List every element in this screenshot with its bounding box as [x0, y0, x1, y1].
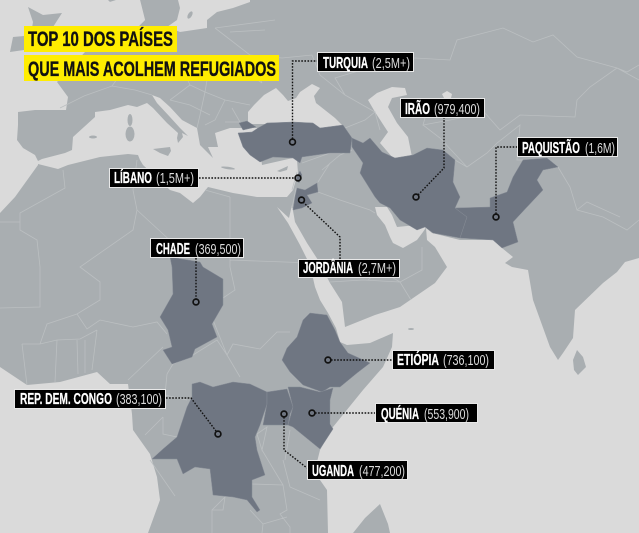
highlighted country: Kenya: [288, 387, 333, 449]
label: Rep. Dem. Congo: REP. DEM. CONGO: [20, 391, 112, 408]
marker: Etiópia: [325, 357, 392, 363]
label: Chade: CHADE: [156, 241, 190, 258]
label: Líbano: (1,5M+): [156, 171, 194, 187]
highlighted country: Ethiopia: [282, 313, 370, 392]
label: Uganda: UGANDA: [312, 463, 354, 480]
label: Turquia: [318, 52, 414, 72]
label: Irão: (979,400): [434, 102, 480, 118]
highlighted country: Turkey: [238, 121, 352, 163]
title: QUE MAIS ACOLHEM REFUGIADOS: [28, 58, 276, 81]
label: Etiópia: ETIÓPIA: [397, 350, 439, 369]
highlighted country: Democratic Republic of the Congo: [152, 382, 267, 512]
label: Turquia: TURQUIA: [323, 55, 368, 72]
marker: Paquistão: [493, 147, 517, 220]
label: Uganda: (477,200): [359, 464, 405, 480]
marker: Uganda: [281, 411, 307, 468]
marker: Rep. Dem. Congo: [166, 398, 221, 437]
marker: Turquia: [290, 61, 317, 145]
label: Irão: [400, 98, 484, 118]
highlighted country: Chad: [160, 257, 223, 364]
label: Líbano: LÍBANO: [114, 168, 152, 187]
label: Etiópia: [392, 350, 494, 370]
label: Quénia: [376, 404, 478, 423]
label: Irão: IRÃO: [405, 98, 430, 118]
label: Jordânia: (2,7M+): [358, 261, 396, 277]
marker: Jordânia: [299, 197, 340, 259]
marker: Líbano: [199, 175, 301, 181]
highlighted country: Pakistan: [455, 158, 558, 248]
title: TOP 10 DOS PAÍSES: [28, 28, 173, 51]
label: Etiópia: (736,100): [443, 353, 489, 369]
label: Chade: (369,500): [195, 242, 241, 258]
marker: Irão: [413, 117, 444, 200]
label: Quénia: (553,900): [424, 407, 469, 423]
highlighted country: Uganda: [263, 389, 293, 425]
map: Mediterranean and Baltic islands: [89, 11, 414, 330]
map: inland seas: [34, 0, 452, 248]
label: Paquistão: PAQUISTÃO: [522, 137, 580, 157]
marker: Chade: [193, 258, 199, 305]
title: [24, 26, 279, 81]
label: Chade: [150, 238, 244, 258]
label: Paquistão: (1,6M): [585, 141, 615, 157]
label: Rep. Dem. Congo: (383,100): [116, 392, 162, 408]
label: Quénia: QUÉNIA: [381, 404, 419, 423]
label: Líbano: [110, 168, 198, 188]
highlighted country: Iran: [352, 138, 467, 238]
label: Turquia: (2,5M+): [372, 56, 410, 72]
label: Jordânia: JORDÂNIA: [303, 258, 353, 277]
highlighted country: Lebanon: [296, 171, 302, 183]
marker: Quénia: [309, 410, 375, 416]
highlighted country: Jordan: [293, 183, 318, 210]
label: Uganda: [308, 460, 408, 480]
